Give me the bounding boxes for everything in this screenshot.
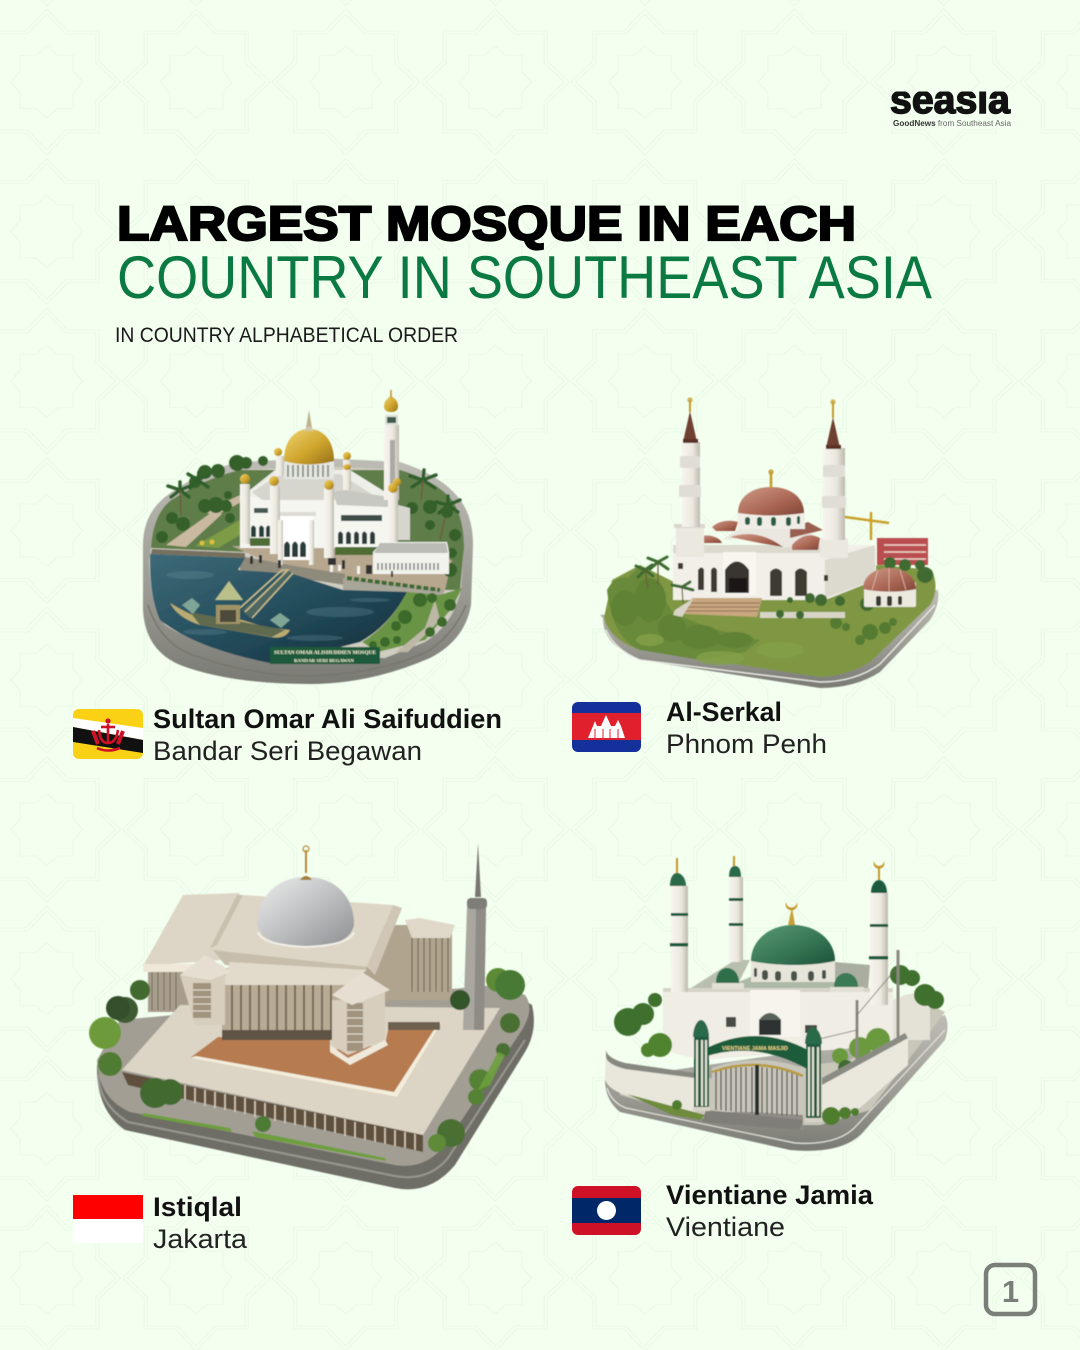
logo: seasia: GoodNews from Southeast Asia — [893, 118, 1011, 128]
annex — [373, 542, 449, 574]
label: Vientiane Jamia — [666, 1180, 874, 1242]
royal barge — [170, 603, 290, 638]
right minaret — [820, 538, 848, 558]
utility pole — [857, 950, 898, 1065]
garden paths — [166, 495, 245, 547]
steps — [680, 598, 762, 617]
flag: Brunei — [73, 709, 143, 759]
page number badge — [986, 1265, 1035, 1314]
illustration: Sultan Omar Ali Saifuddien mosque model — [143, 390, 473, 684]
label: Vientiane Jamia: Vientiane Jamia — [666, 1180, 874, 1210]
wing fills behind roof — [148, 968, 232, 1012]
plaque: BANDAR SERI BEGAWAN — [294, 658, 355, 663]
flag: Cambodia — [572, 702, 641, 752]
logo: seasia — [890, 92, 1012, 126]
flag: Laos — [572, 1186, 641, 1235]
label: Istiqlal: Istiqlal — [153, 1192, 242, 1222]
green arch sign — [703, 1036, 808, 1069]
flag: Indonesia — [73, 1195, 143, 1243]
trees — [614, 965, 944, 1057]
main dome — [738, 512, 805, 529]
wings — [143, 893, 240, 966]
silver dome — [257, 877, 354, 947]
label: Al-Serkal: Al-Serkal — [666, 697, 782, 727]
subtitle: IN COUNTRY ALPHABETICAL ORDER — [115, 323, 458, 347]
small domes — [716, 968, 739, 983]
driveway — [705, 1112, 803, 1130]
title: COUNTRY IN SOUTHEAST ASIA — [117, 244, 932, 311]
main roof — [213, 895, 393, 967]
label: Al-Serkal — [666, 697, 827, 759]
trees — [89, 968, 525, 1152]
hedges — [142, 1113, 232, 1132]
title: LARGEST MOSQUE IN EACH — [117, 198, 856, 251]
illustration: Vientiane Jamia mosque model — [605, 853, 948, 1151]
drum and green dome — [751, 960, 835, 982]
water — [150, 554, 407, 663]
crane and apartment — [845, 512, 889, 540]
illustration: Istiqlal mosque model — [89, 843, 534, 1189]
palm trees — [168, 470, 460, 513]
entrance — [750, 990, 800, 1037]
courtyard roof — [122, 1005, 500, 1135]
logo: seasia: seasia — [890, 78, 1011, 122]
illustration: Vientiane Jamia mosque model: VIENTIANE JAMA MASJID — [722, 1046, 788, 1052]
front colonnade — [122, 1072, 423, 1152]
landscaping right — [362, 588, 462, 652]
plaque: SULTAN OMAR ALISHUDDIEN MOSQUE — [274, 651, 377, 656]
causeway — [242, 570, 293, 618]
main walls — [663, 990, 893, 1060]
trees right — [406, 500, 461, 577]
label: Sultan Omar Ali Saifuddien: Sultan Omar Ali Saifuddien — [153, 704, 502, 734]
plaque — [270, 647, 380, 664]
label: Sultan Omar Ali Saifuddien: Bandar Seri Begawan — [153, 736, 422, 766]
building — [673, 545, 876, 600]
gate pillars — [693, 1020, 710, 1111]
tall minaret — [384, 425, 399, 500]
front boundary walls — [605, 1050, 695, 1112]
minaret — [463, 907, 486, 1030]
roofs — [695, 535, 722, 543]
label: Vientiane Jamia: Vientiane — [666, 1212, 785, 1242]
small minarets — [240, 456, 398, 565]
page number badge: 1 — [1002, 1274, 1019, 1309]
main facade — [222, 970, 340, 1040]
shrubs near building — [776, 557, 933, 619]
left minaret — [676, 525, 704, 557]
front towers — [180, 975, 225, 1025]
palm trees — [636, 557, 693, 590]
minarets — [670, 855, 688, 992]
drum and gold dome — [284, 460, 334, 479]
label: Sultan Omar Ali Saifuddien — [153, 704, 502, 766]
illustration: Al-Serkal mosque model — [600, 398, 938, 688]
small copper dome — [864, 582, 916, 607]
plaza — [232, 546, 452, 590]
title — [117, 198, 932, 311]
label: Istiqlal: Jakarta — [153, 1224, 248, 1254]
label: Al-Serkal: Phnom Penh — [666, 729, 827, 759]
mosque building — [250, 465, 345, 490]
label: Istiqlal — [153, 1192, 248, 1254]
trees left — [156, 455, 268, 543]
gate — [712, 1060, 803, 1115]
people — [250, 555, 393, 577]
